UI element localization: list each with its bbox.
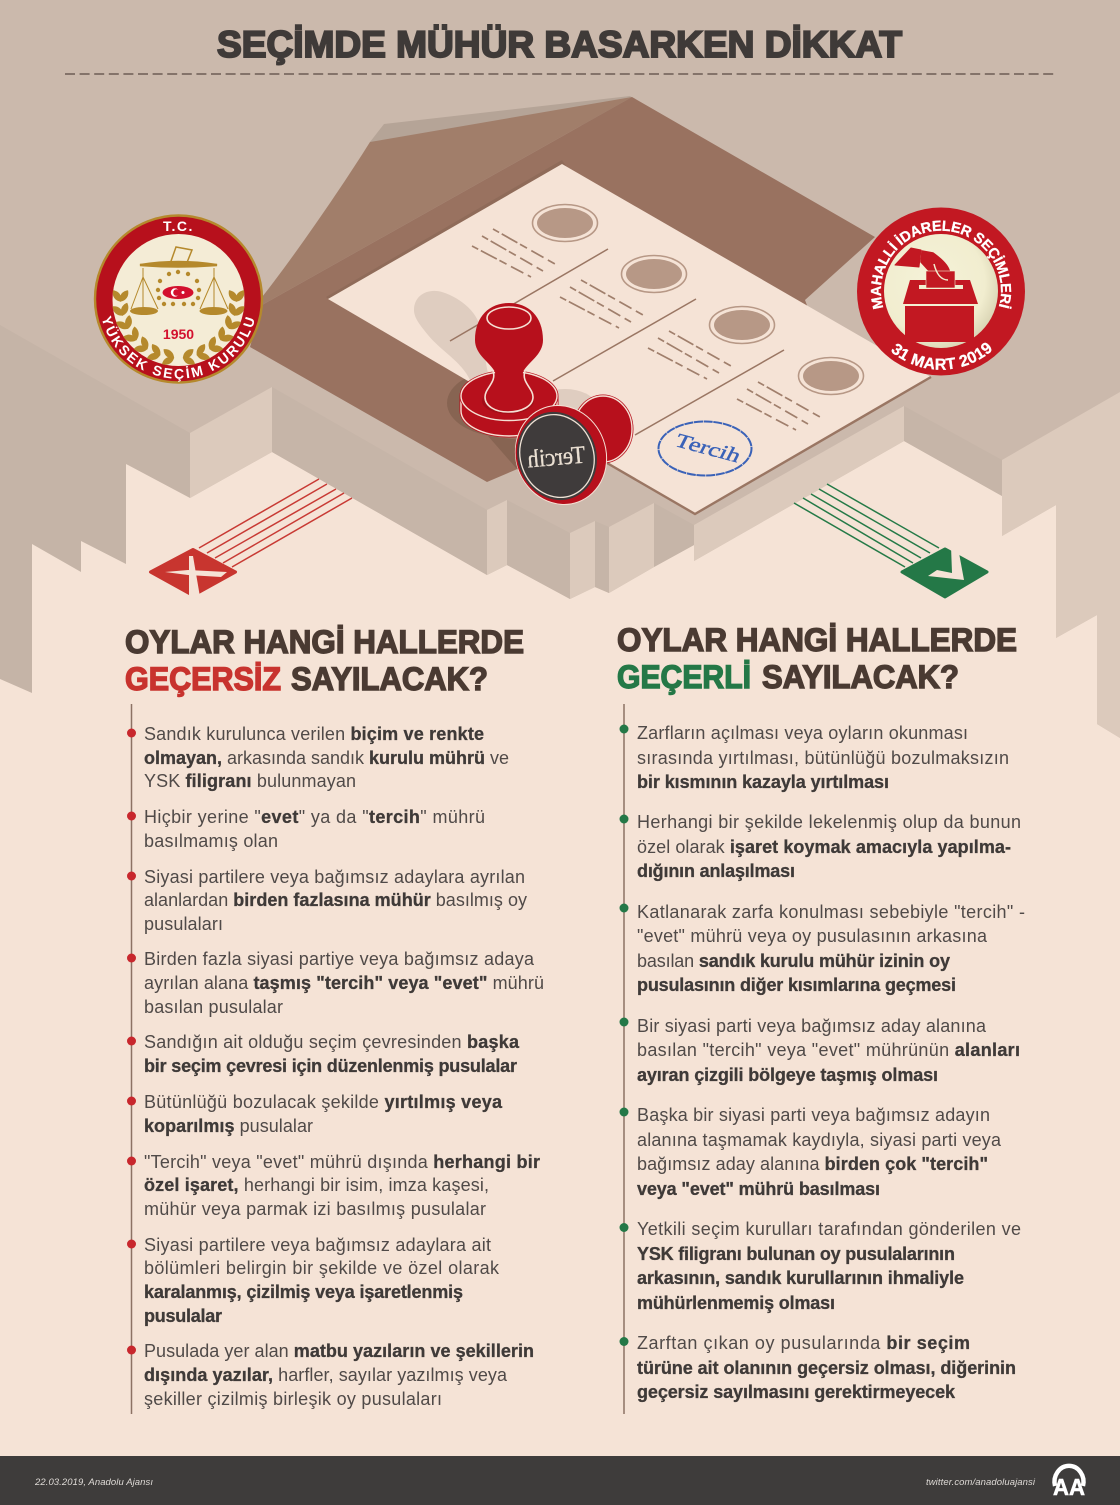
list: invalid vote conditions: bir seçim çevresi için düzenlenmiş pusulalar <box>144 1056 517 1076</box>
heading: valid votes <box>617 622 1017 695</box>
list: valid vote conditions: dığının anlaşılması <box>637 861 795 881</box>
ballot dividers <box>450 249 784 435</box>
list: valid vote conditions: alanına taşmamak kaydıyla, siyasi parti veya <box>637 1130 1002 1150</box>
seal arc text bottom: 31 MART 2019 <box>892 342 992 370</box>
list: valid vote conditions: YSK filigranı bulunan oy pusulalarının <box>637 1244 955 1264</box>
list: invalid vote conditions: olmayan, arkasında sandık kurulu mührü ve <box>144 748 509 768</box>
timeline: valid list <box>620 704 628 1414</box>
list: invalid vote conditions: özel işaret, herhangi bir isim, imza kaşesi, <box>144 1175 489 1195</box>
footer bar <box>0 1456 1120 1505</box>
footer date: 22.03.2019, Anadolu Ajansı <box>34 1477 153 1488</box>
title divider <box>65 73 1055 75</box>
list: valid vote conditions: Zarfların açılması veya oyların okunması <box>637 723 968 743</box>
list: valid vote conditions: özel olarak işaret koymak amacıyla yapılma- <box>637 837 1011 857</box>
list: invalid vote conditions: basılmamış olan <box>144 831 278 851</box>
seal: Mahalli İdareler Seçimleri <box>857 208 1025 376</box>
list: invalid vote conditions: karalanmış, çizilmiş veya işaretlenmiş <box>144 1282 463 1302</box>
list: invalid vote conditions: ayrılan alana taşmış "tercih" veya "evet" mührü <box>144 973 544 993</box>
list: valid vote conditions: basılan "tercih" veya "evet" mührünün alanları <box>637 1040 1020 1060</box>
list: valid vote conditions: arkasının, sandık kurullarının ihmaliyle <box>637 1268 964 1288</box>
list: valid vote conditions: Yetkili seçim kurulları tarafından gönderilen ve <box>637 1219 1021 1239</box>
icon: green check mark <box>902 546 987 597</box>
list: invalid vote conditions: Hiçbir yerine "evet" ya da "tercih" mührü <box>144 807 485 827</box>
wreath <box>109 288 248 368</box>
icon: ballot box <box>895 248 978 342</box>
list: invalid vote conditions: dışında yazılar, harfler, sayılar yazılmış veya <box>144 1365 508 1385</box>
heading: invalid votes <box>125 624 524 697</box>
heading: valid votes: OYLAR HANGİ HALLERDE <box>617 622 1017 658</box>
list: invalid vote conditions: YSK filigranı bulunmayan <box>144 771 356 791</box>
heading: valid votes: GEÇERLİ <box>617 659 751 695</box>
heading: invalid votes: SAYILACAK? <box>291 661 488 697</box>
list: valid vote conditions: sırasında yırtılması, bütünlüğü bozulmaksızın <box>637 748 1009 768</box>
list: valid vote conditions: Herhangi bir şekilde lekelenmiş olup da bunun <box>637 812 1021 832</box>
mirrored stamp text: Tercih <box>526 442 586 474</box>
icon: AA logo: AA <box>1053 1474 1085 1500</box>
list: invalid vote conditions: Birden fazla siyasi partiye veya bağımsız adaya <box>144 949 535 969</box>
list: valid vote conditions: veya "evet" mührü basılması <box>637 1179 880 1199</box>
list: valid vote conditions: bir kısmının kazayla yırtılması <box>637 772 889 792</box>
list: valid vote conditions: Başka bir siyasi parti veya bağımsız adayın <box>637 1105 990 1125</box>
red stamp lying on its side with mirrored tercih face <box>502 393 634 517</box>
heading: invalid votes: OYLAR HANGİ HALLERDE <box>125 624 524 660</box>
list: invalid vote conditions: mühür veya parmak izi basılmış pusulalar <box>144 1199 486 1219</box>
isometric blocks backdrop <box>0 325 1120 1505</box>
desk: brown box under the ballot <box>250 96 875 482</box>
heading: invalid votes: GEÇERSİZ <box>125 661 281 697</box>
arrow lines: invalid <box>199 479 352 567</box>
ballot paper <box>328 164 931 514</box>
ballot circles <box>532 204 864 394</box>
list: invalid vote conditions: Pusulada yer alan matbu yazıların ve şekillerin <box>144 1341 534 1361</box>
emblem: stars <box>156 270 201 306</box>
emblem: flag crescent <box>162 286 194 299</box>
list: valid vote conditions <box>637 723 1025 1402</box>
timeline: invalid list <box>127 704 136 1414</box>
list: invalid vote conditions: koparılmış pusulalar <box>144 1116 313 1136</box>
list: invalid vote conditions: şekiller çizilmiş birleşik oy pusulaları <box>144 1389 442 1409</box>
red upright stamp <box>460 303 595 438</box>
seal arc text top: MAHALLİ İDARELER SEÇİMLERİ <box>870 220 1012 310</box>
list: valid vote conditions: ayıran çizgili bölgeye taşmış olması <box>637 1065 938 1085</box>
list: invalid vote conditions: Sandığın ait olduğu seçim çevresinden başka <box>144 1032 520 1052</box>
list: invalid vote conditions: Bütünlüğü bozulacak şekilde yırtılmış veya <box>144 1092 503 1112</box>
footer twitter: twitter.com/anadoluajansi <box>926 1477 1036 1488</box>
list: invalid vote conditions <box>144 724 544 1409</box>
heading: valid votes: SAYILACAK? <box>762 659 959 695</box>
list: invalid vote conditions: "Tercih" veya "evet" mührü dışında herhangi bir <box>144 1152 540 1172</box>
list: invalid vote conditions: pusulaları <box>144 914 223 934</box>
list: valid vote conditions: pusulasının diğer kısımlarına geçmesi <box>637 975 956 995</box>
seal arc text: YÜKSEK SEÇİM KURULU <box>102 315 254 382</box>
ballot candidate text placeholders <box>472 229 820 430</box>
list: valid vote conditions: türüne ait olanının geçersiz olması, diğerinin <box>637 1358 1016 1378</box>
list: invalid vote conditions: Sandık kurulunca verilen biçim ve renkte <box>144 724 484 744</box>
blue tercih stamp mark <box>658 422 752 476</box>
blue tercih stamp mark: Tercih <box>671 430 745 467</box>
list: valid vote conditions: bağımsız aday alanına birden çok "tercih" <box>637 1154 988 1174</box>
list: invalid vote conditions: pusulalar <box>144 1306 222 1326</box>
list: invalid vote conditions: Siyasi partilere veya bağımsız adaylara ayrılan <box>144 867 525 887</box>
list: invalid vote conditions: Siyasi partilere veya bağımsız adaylara ait <box>144 1235 491 1255</box>
list: valid vote conditions: geçersiz sayılmasını gerektirmeyecek <box>637 1382 956 1402</box>
shadow of stamp on paper <box>414 291 490 385</box>
title: SEÇİMDE MÜHÜR BASARKEN DİKKAT <box>217 24 902 65</box>
seal top text: T.C. <box>163 218 194 234</box>
icon: red X mark <box>150 550 236 599</box>
list: valid vote conditions: mühürlenmemiş olması <box>637 1293 835 1313</box>
year: 1950 <box>163 326 194 342</box>
list: valid vote conditions: Bir siyasi parti veya bağımsız aday alanına <box>637 1016 987 1036</box>
list: invalid vote conditions: alanlardan birden fazlasına mühür basılmış oy <box>144 890 527 910</box>
list: invalid vote conditions: bölümleri belirgin bir şekilde ve özel olarak <box>144 1258 500 1278</box>
list: valid vote conditions: Zarftan çıkan oy pusularında bir seçim <box>637 1333 970 1353</box>
list: valid vote conditions: basılan sandık kurulu mühür izinin oy <box>637 951 950 971</box>
seal: Yüksek Seçim Kurulu <box>94 214 264 384</box>
list: valid vote conditions: "evet" mührü veya oy pusulasının arkasına <box>637 926 988 946</box>
list: invalid vote conditions: basılan pusulalar <box>144 997 283 1017</box>
arrow lines: valid <box>794 484 939 567</box>
list: valid vote conditions: Katlanarak zarfa konulması sebebiyle "tercih" - <box>637 902 1025 922</box>
emblem: scales of justice <box>130 247 228 315</box>
